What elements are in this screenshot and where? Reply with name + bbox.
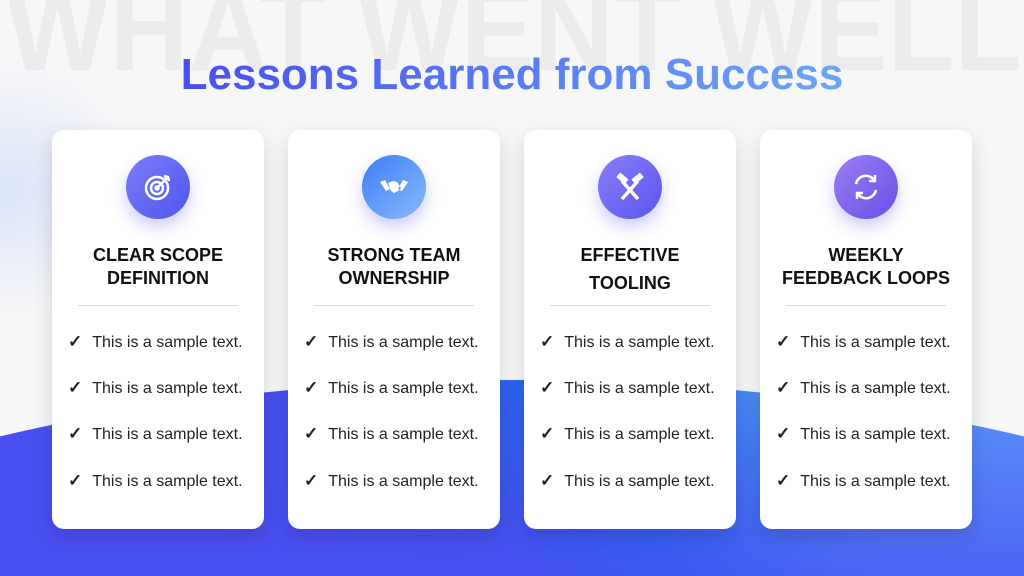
card: effective tooling: ✓ This is a sample text. — [540, 332, 715, 351]
heading: TOOLING — [589, 273, 671, 293]
heading: OWNERSHIP — [338, 268, 450, 288]
card: strong team ownership: ✓ This is a sample text. — [304, 378, 479, 397]
heading — [328, 245, 460, 288]
card: weekly feedback loops: ✓ This is a sample text. — [776, 332, 951, 351]
card: clear scope definition: ✓ This is a sample text. — [68, 471, 243, 490]
list — [776, 332, 951, 490]
list — [540, 332, 715, 490]
card: effective tooling: ✓ This is a sample text. — [540, 424, 715, 443]
heading: STRONG TEAM — [328, 245, 460, 265]
icon: target — [126, 155, 190, 219]
heading: DEFINITION — [107, 268, 209, 288]
card: weekly feedback loops: ✓ This is a sample text. — [776, 424, 951, 443]
card: strong team ownership: ✓ This is a sample text. — [304, 424, 479, 443]
heading: FEEDBACK LOOPS — [782, 268, 950, 288]
icon: refresh loop — [834, 155, 898, 219]
heading — [782, 245, 950, 288]
title: Lessons Learned from Success — [181, 50, 843, 99]
card: strong team ownership — [288, 130, 500, 529]
card: clear scope definition: ✓ This is a sample text. — [68, 378, 243, 397]
heading — [93, 245, 223, 288]
card: effective tooling: ✓ This is a sample text. — [540, 471, 715, 490]
card: weekly feedback loops: ✓ This is a sample text. — [776, 471, 951, 490]
card: weekly feedback loops: ✓ This is a sample text. — [776, 378, 951, 397]
heading: WEEKLY — [828, 245, 904, 265]
list — [304, 332, 479, 490]
heading: EFFECTIVE — [580, 245, 680, 265]
icon: handshake — [362, 155, 426, 219]
icon: tools — [598, 155, 662, 219]
card: clear scope definition: ✓ This is a sample text. — [68, 332, 243, 351]
card: effective tooling — [524, 130, 736, 529]
card: strong team ownership: ✓ This is a sample text. — [304, 471, 479, 490]
card: strong team ownership: ✓ This is a sample text. — [304, 332, 479, 351]
card: clear scope definition — [52, 130, 264, 529]
card: clear scope definition: ✓ This is a sample text. — [68, 424, 243, 443]
heading — [580, 245, 680, 293]
card: weekly feedback loops — [760, 130, 972, 529]
card: effective tooling: ✓ This is a sample text. — [540, 378, 715, 397]
heading: CLEAR SCOPE — [93, 245, 223, 265]
list — [68, 332, 243, 490]
